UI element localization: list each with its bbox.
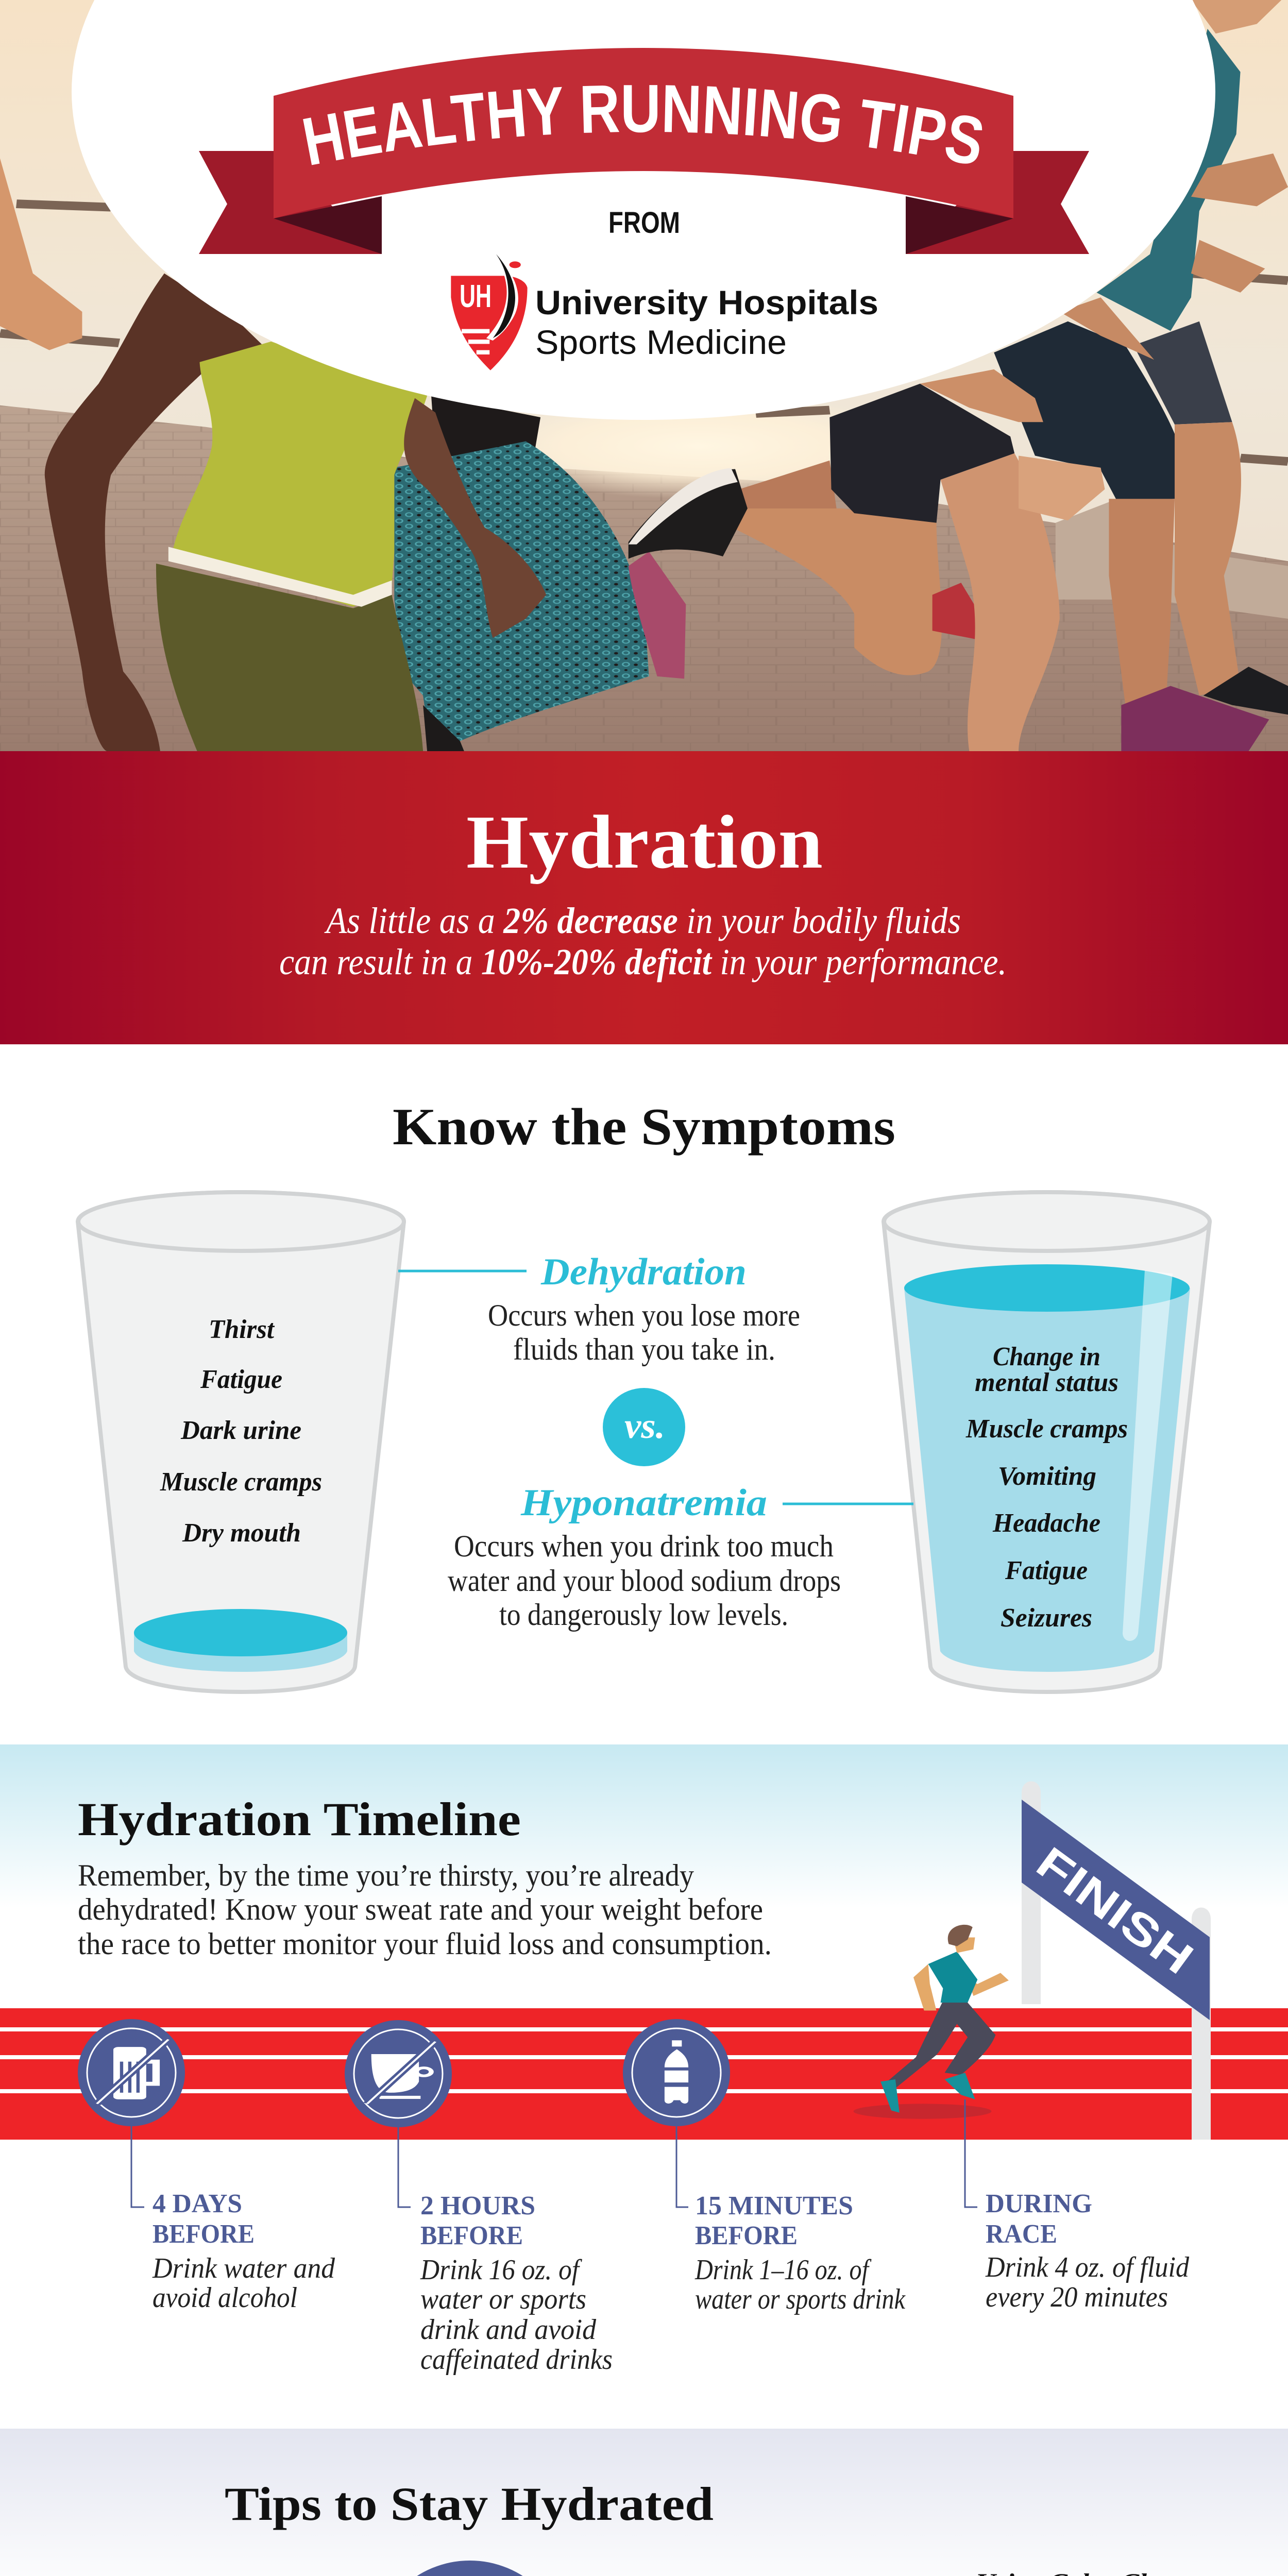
definition: dehydration: Dehydration xyxy=(540,1251,747,1293)
symptoms list: dehydration: Thirst xyxy=(209,1315,275,1344)
panel: know the symptoms xyxy=(78,1098,1210,1692)
definition: hyponatremia: to dangerously low levels. xyxy=(499,1598,788,1632)
symptoms list: dehydration: Dark urine xyxy=(180,1416,301,1445)
finish line banner: FINISH xyxy=(1027,1838,1202,1984)
stop: 15 minutes before: BEFORE xyxy=(695,2221,798,2250)
connector xyxy=(398,2125,411,2207)
stop: 2 hours before xyxy=(345,2020,613,2376)
definition: dehydration xyxy=(398,1251,800,1366)
icon: water bottle xyxy=(623,2019,730,2126)
symptoms list: dehydration: Fatigue xyxy=(200,1365,282,1394)
title: HEALTHY RUNNING TIPS xyxy=(303,85,982,165)
text: intro paragraph: the race to better monitor your fluid loss and consumption. xyxy=(78,1927,772,1961)
stop: 4 days before: BEFORE xyxy=(152,2219,255,2249)
white ellipse header xyxy=(72,0,1215,420)
definition: dehydration: Occurs when you lose more xyxy=(488,1298,800,1332)
symptoms list: hyponatremia: Headache xyxy=(992,1509,1100,1538)
stop: during race: RACE xyxy=(986,2219,1057,2249)
description: water or sports xyxy=(420,2283,586,2315)
definition: dehydration: fluids than you take in. xyxy=(513,1332,775,1366)
description xyxy=(420,2254,613,2376)
logo: University Hospitals Sports Medicine: Sports Medicine xyxy=(535,323,787,361)
definition: hyponatremia: Hyponatremia xyxy=(520,1482,767,1524)
definition: hyponatremia xyxy=(448,1482,913,1632)
heading: hydration: Hydration xyxy=(466,800,823,885)
definition: hyponatremia: water and your blood sodium drops xyxy=(448,1564,841,1598)
symptoms list: dehydration: Dry mouth xyxy=(182,1518,301,1548)
connector xyxy=(131,2123,144,2207)
description: Drink water and xyxy=(152,2252,335,2284)
label: 15 MINUTES xyxy=(695,2191,853,2221)
stop: 4 days before xyxy=(78,2019,335,2314)
label: DURING xyxy=(986,2189,1092,2218)
symptoms list: hyponatremia: mental status xyxy=(975,1368,1118,1397)
heading: know the symptoms: Know the Symptoms xyxy=(393,1098,895,1156)
glass: dehydration xyxy=(78,1192,404,1692)
text: fluid decrease line 1: As little as a 2% decrease in your bodily fluids xyxy=(324,900,961,941)
stop: during race: every 20 minutes xyxy=(986,2281,1168,2313)
runner illustration xyxy=(854,1925,1009,2119)
text: from: FROM xyxy=(608,206,680,240)
panel: hero photo of runners xyxy=(0,0,1288,751)
badge: vs xyxy=(603,1388,685,1466)
panel: hydration band xyxy=(0,751,1288,1044)
text: fluid decrease line 2: can result in a 10%-20% deficit in your performance. xyxy=(279,941,1007,982)
symptoms list: hyponatremia: Vomiting xyxy=(998,1462,1096,1491)
connector xyxy=(965,2099,977,2207)
description: Drink 4 oz. of fluid xyxy=(985,2251,1190,2283)
description: drink and avoid xyxy=(420,2314,597,2346)
stop: 15 minutes before: water or sports drink xyxy=(695,2283,906,2315)
symptoms list: hyponatremia: Muscle cramps xyxy=(965,1414,1128,1444)
text: intro paragraph: Remember, by the time you’re thirsty, you’re already xyxy=(78,1858,694,1892)
stop: during race xyxy=(965,2099,1190,2313)
symptoms list: dehydration: Muscle cramps xyxy=(160,1467,322,1497)
label: 4 DAYS xyxy=(152,2189,242,2218)
panel: tips to stay hydrated xyxy=(0,2429,1288,2576)
symptoms list: dehydration xyxy=(160,1315,322,1548)
panel: hydration timeline xyxy=(0,1744,1288,2376)
finish line banner xyxy=(1022,1782,1211,2140)
race track xyxy=(0,2008,1288,2140)
connector xyxy=(676,2123,688,2207)
stop: 2 hours before: BEFORE xyxy=(420,2221,523,2250)
glass: hyponatremia xyxy=(884,1192,1210,1692)
logo: University Hospitals Sports Medicine xyxy=(451,252,878,370)
definition: hyponatremia: Occurs when you drink too much xyxy=(454,1529,834,1563)
badge: vs: vs. xyxy=(624,1406,665,1446)
icon: no alcohol xyxy=(78,2019,185,2126)
symptoms list: hyponatremia: Change in xyxy=(993,1342,1100,1371)
description: caffeinated drinks xyxy=(420,2344,613,2376)
symptoms list: hyponatremia xyxy=(965,1342,1128,1633)
logo: University Hospitals Sports Medicine: University Hospitals xyxy=(535,283,878,321)
heading: hydration timeline: Hydration Timeline xyxy=(78,1793,521,1845)
tip: eat xyxy=(371,2561,568,2576)
label: 2 HOURS xyxy=(420,2191,535,2221)
stop: 15 minutes before xyxy=(623,2019,906,2315)
icon: no caffeine xyxy=(345,2020,452,2127)
logo: University Hospitals Sports Medicine: UH xyxy=(460,279,492,314)
stop: 4 days before: avoid alcohol xyxy=(152,2282,297,2314)
description: Drink 16 oz. of xyxy=(420,2254,583,2286)
symptoms list: hyponatremia: Fatigue xyxy=(1005,1556,1088,1585)
text: intro paragraph: dehydrated! Know your sweat rate and your weight before xyxy=(78,1892,763,1926)
text: intro paragraph xyxy=(78,1858,772,1961)
banner: Healthy Running Tips ribbon xyxy=(199,48,1089,254)
heading: tips to stay hydrated: Tips to Stay Hydrated xyxy=(225,2478,714,2530)
symptoms list: hyponatremia: Seizures xyxy=(1001,1603,1092,1633)
description: Drink 1–16 oz. of xyxy=(694,2254,872,2286)
